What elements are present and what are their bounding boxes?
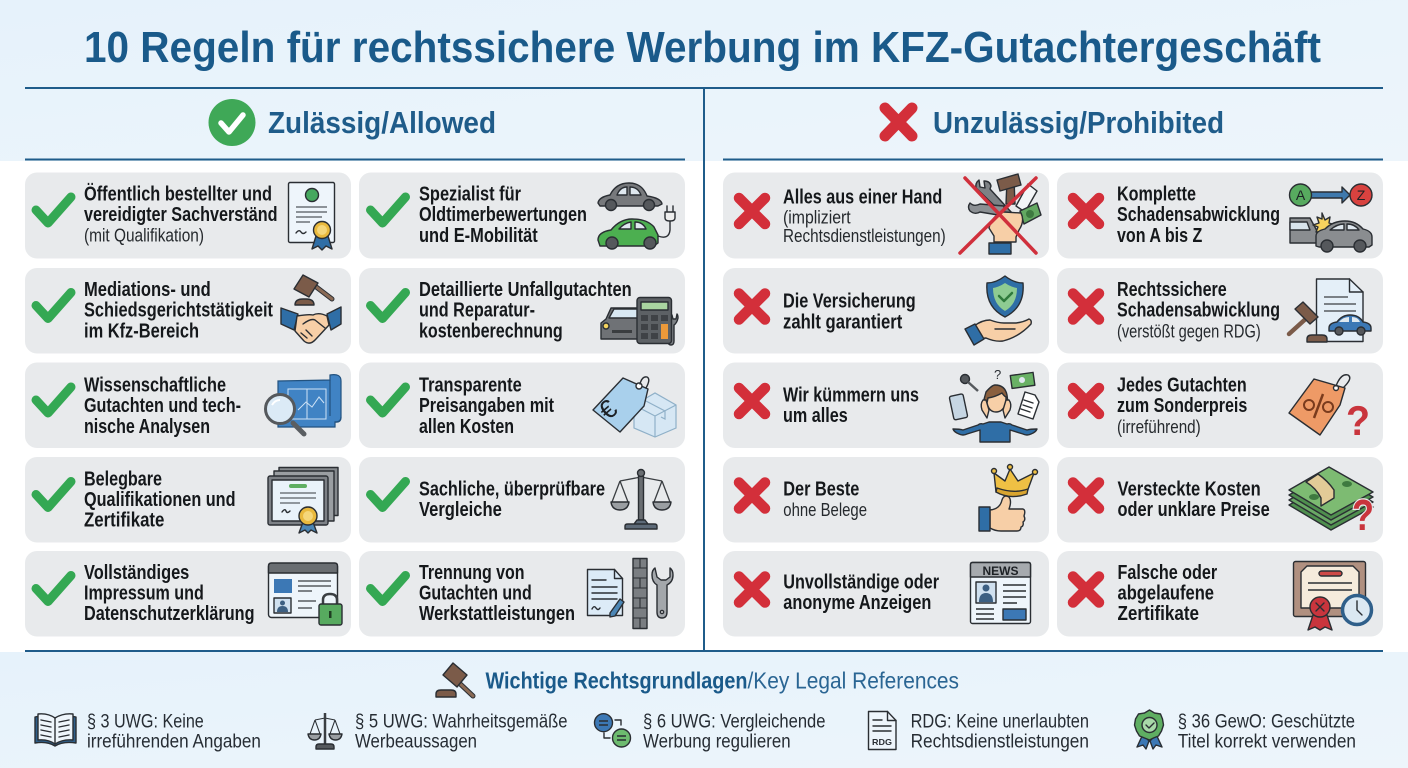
card: Jedes Gutachten zum Sonderpreis [1057, 362, 1383, 448]
card: Jedes Gutachten zum Sonderpreis: zum Sonderpreis [1117, 395, 1247, 417]
reference: RDG [868, 710, 1089, 753]
card: Öffentlich bestellter Sachverständ [25, 172, 351, 258]
card: Öffentlich bestellter Sachverständ: (mit Qualifikation) [84, 225, 204, 246]
card: Spezialist für Oldtimer und E-Mobilität: und E-Mobilität [419, 225, 538, 247]
card: Alles aus einer Hand: (impliziert [783, 206, 851, 228]
icon: document, gavel and car [1289, 279, 1371, 342]
card: Wissenschaftliche Gutachten: nische Analysen [84, 416, 210, 438]
card: Belegbare Qualifikationen: Zertifikate [84, 510, 164, 532]
reference: § 3 UWG [35, 710, 261, 753]
card: Jedes Gutachten zum Sonderpreis: (irreführend) [1117, 416, 1201, 437]
icon: gavel and handshake [281, 275, 341, 343]
footer heading [436, 663, 959, 697]
card: Vollständiges Impressum: Vollständiges [84, 562, 189, 584]
card: Mediations- und Schiedsgerichtstätigkeit [25, 268, 351, 354]
card: Sachliche Vergleiche [359, 457, 685, 542]
icon: discount tag and question mark: ? [1346, 397, 1370, 444]
reference: § 6 UWG: Werbung regulieren [643, 731, 791, 753]
icon: price tag with euro and box: € [593, 393, 623, 426]
panel: prohibited rules [723, 172, 1383, 636]
card: Transparente Preisangaben: Preisangaben mit [419, 395, 554, 417]
card: Wir kümmern uns um alles: um alles [783, 405, 848, 427]
card: Vollständiges Impressum [25, 551, 351, 636]
icon: shield over open hand [965, 276, 1031, 345]
icon: bundle of cash and question mark [1289, 467, 1374, 540]
reference: § 6 UWG [594, 710, 826, 753]
card: Transparente Preisangaben [359, 362, 685, 448]
card: Rechtssichere Schadensabwicklung [1057, 268, 1383, 354]
card: Die Versicherung zahlt garantiert: zahlt garantiert [783, 311, 903, 333]
card: Falsche oder abgelaufene Zertifikate: Zertifikate [1118, 603, 1199, 625]
icon: scales [308, 713, 342, 749]
reference: § 36 GewO: § 36 GewO: Geschützte [1178, 710, 1355, 732]
card: Trennung von Gutachten und Werkstatt: Trennung von [419, 562, 524, 584]
reference: § 5 UWG: § 5 UWG: Wahrheitsgemäße [355, 710, 568, 732]
heading text: Zulässig/Allowed: Zulässig/Allowed [268, 105, 496, 140]
card: Unvollständige oder anonyme Anzeigen: anonyme Anzeigen [783, 592, 931, 614]
card: Trennung von Gutachten und Werkstatt: Werkstattleistungen [419, 603, 575, 625]
reference: § 5 UWG [308, 710, 568, 753]
card: Komplette Schadensabwicklung: Komplette [1117, 184, 1196, 206]
icon: A to Z arrow and car crash [1290, 184, 1372, 252]
icon: A to Z arrow and car crash: Z [1357, 187, 1366, 203]
heading text: Wichtige Rechtsgrundlagen [486, 667, 748, 693]
icon: comparison circles [594, 714, 630, 747]
card: Komplette Schadensabwicklung: Schadensabwicklung [1117, 204, 1280, 226]
icon: price tag with euro and box [593, 377, 676, 437]
card: Trennung von Gutachten und Werkstatt [359, 551, 685, 636]
icon: open book [35, 714, 76, 746]
card: Spezialist für Oldtimer und E-Mobilität [359, 172, 685, 258]
card: Detaillierte Unfallgutachten: und Reparatur- [419, 300, 535, 322]
reference: § 3 UWG: irreführenden Angaben [87, 731, 261, 753]
panel: allowed rules [25, 172, 685, 636]
card: Falsche oder abgelaufene Zertifikate: abgelaufene [1118, 582, 1214, 604]
card: Versteckte Kosten: oder unklare Preise [1118, 499, 1270, 521]
card: Alles aus einer Hand: Alles aus einer Hand [783, 186, 942, 208]
card: Belegbare Qualifikationen [25, 457, 351, 542]
icon: red cross [885, 108, 912, 136]
card: Spezialist für Oldtimer und E-Mobilität: Oldtimerbewertungen [419, 204, 587, 226]
icon: classic car and electric car [598, 183, 675, 249]
card: Alles aus einer Hand [723, 172, 1049, 258]
card: Alles aus einer Hand: Rechtsdienstleistungen) [783, 225, 946, 246]
reference: RDG: RDG: Keine unerlaubten [911, 710, 1089, 732]
icon: newspaper: NEWS [982, 564, 1018, 578]
card: Sachliche Vergleiche: Vergleiche [419, 499, 502, 521]
card: Wir kümmern uns um alles: Wir kümmern uns [783, 384, 919, 406]
card: Der Beste ohne Belege: Der Beste [783, 479, 859, 501]
card: Unvollständige oder anonyme Anzeigen [723, 551, 1049, 636]
card: Mediations- und Schiedsgerichtstätigkeit: im Kfz-Bereich [84, 321, 199, 343]
footer: legal references [35, 663, 1356, 753]
icon: expired certificate with seal and clock [1294, 562, 1372, 630]
heading: allowed [208, 99, 496, 146]
icon: blueprint and magnifier [266, 375, 341, 434]
reference: § 36 GewO [1134, 710, 1356, 753]
card: Komplette Schadensabwicklung [1057, 172, 1383, 258]
card: Der Beste ohne Belege: ohne Belege [783, 499, 867, 520]
icon: RDG document [868, 712, 896, 750]
card: Öffentlich bestellter Sachverständ: vereidigter Sachverständ [84, 204, 278, 226]
card: Öffentlich bestellter Sachverständ: Öffentlich bestellter und [84, 183, 272, 206]
icon: certificate [288, 182, 334, 250]
card: Komplette Schadensabwicklung: von A bis Z [1117, 225, 1202, 247]
card: Rechtssichere Schadensabwicklung: (verstößt gegen RDG) [1117, 321, 1261, 342]
card: Rechtssichere Schadensabwicklung: Rechtssichere [1117, 279, 1227, 301]
icon: gavel [436, 663, 473, 697]
card: Die Versicherung zahlt garantiert: Die Versicherung [783, 291, 916, 313]
icon: A to Z arrow and car crash: A [1296, 187, 1306, 203]
icon: hand holding tools, crossed out [960, 174, 1041, 254]
card: Wir kümmern uns um alles [723, 362, 1049, 448]
card: Belegbare Qualifikationen: Belegbare [84, 468, 162, 490]
icon: bundle of cash and question mark: ? [1352, 491, 1374, 540]
card: Falsche oder abgelaufene Zertifikate [1057, 551, 1383, 636]
reference: § 5 UWG: Werbeaussagen [355, 731, 477, 753]
card: Wissenschaftliche Gutachten [25, 362, 351, 448]
card: Versteckte Kosten: Versteckte Kosten [1118, 479, 1261, 501]
footer heading: /Key Legal References [748, 667, 959, 693]
icon: stacked certificates [268, 468, 338, 533]
heading: prohibited [885, 105, 1224, 140]
card: Belegbare Qualifikationen: Qualifikationen und [84, 489, 236, 511]
card: Trennung von Gutachten und Werkstatt: Gutachten und [419, 582, 532, 604]
reference: RDG: Rechtsdienstleistungen [911, 731, 1089, 753]
card: Transparente Preisangaben: allen Kosten [419, 416, 514, 438]
reference: § 36 GewO: Titel korrekt verwenden [1178, 731, 1356, 753]
card: Spezialist für Oldtimer und E-Mobilität: Spezialist für [419, 184, 521, 206]
card: Detaillierte Unfallgutachten [359, 268, 685, 354]
card: Transparente Preisangaben: Transparente [419, 375, 522, 397]
icon: document, brick wall and wrench [588, 558, 673, 628]
icon: discount tag and question mark [1289, 375, 1370, 444]
heading text: Unzulässig/Prohibited: Unzulässig/Prohibited [933, 105, 1224, 140]
icon: RDG document: RDG [872, 737, 892, 747]
card: Mediations- und Schiedsgerichtstätigkeit: Mediations- und [84, 279, 211, 301]
card: Die Versicherung zahlt garantiert [723, 268, 1049, 354]
card: Unvollständige oder anonyme Anzeigen: Unvollständige oder [783, 572, 939, 594]
title: 10 Regeln für rechtssichere Werbung im KFZ-Gutachtergeschäft [84, 23, 1321, 72]
icon: thumbs up with crown [979, 464, 1038, 531]
icon: web page and padlock [268, 563, 342, 625]
reference: § 6 UWG: § 6 UWG: Vergleichende [643, 710, 826, 732]
card: Vollständiges Impressum: Impressum und [84, 582, 204, 604]
card: Mediations- und Schiedsgerichtstätigkeit: Schiedsgerichtstätigkeit [84, 300, 273, 322]
card: Vollständiges Impressum: Datenschutzerklärung [84, 603, 254, 625]
icon: overwhelmed person with key, money, phone, document [949, 367, 1039, 442]
icon: newspaper [970, 562, 1030, 624]
icon: damaged car, calculator and wrench [601, 298, 678, 345]
card: Rechtssichere Schadensabwicklung: Schadensabwicklung [1117, 300, 1280, 322]
icon: green badge [1134, 710, 1164, 749]
card: Detaillierte Unfallgutachten: Detaillierte Unfallgutachten [419, 279, 632, 301]
card: Jedes Gutachten zum Sonderpreis: Jedes Gutachten [1117, 375, 1247, 397]
icon: overwhelmed person with key, money, phone, document: ? [994, 367, 1001, 382]
icon: scales of justice [611, 470, 671, 529]
card: Falsche oder abgelaufene Zertifikate: Falsche oder [1118, 562, 1217, 584]
card: Versteckte Kosten [1057, 457, 1383, 542]
card: Wissenschaftliche Gutachten: Wissenschaftliche [84, 375, 226, 397]
card: Sachliche Vergleiche: Sachliche, überprüfbare [419, 479, 605, 501]
card: Wissenschaftliche Gutachten: Gutachten und tech- [84, 395, 241, 417]
icon: green check circle [208, 99, 256, 146]
reference: § 3 UWG: § 3 UWG: Keine [87, 710, 204, 732]
card: Der Beste ohne Belege [723, 457, 1049, 542]
card: Detaillierte Unfallgutachten: kostenberechnung [419, 321, 563, 343]
